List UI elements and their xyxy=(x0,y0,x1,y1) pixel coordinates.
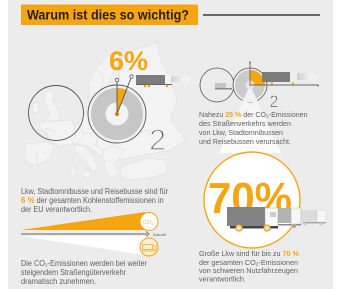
light beam xyxy=(219,85,281,153)
chart: 6 % pie in O of CO2 xyxy=(88,75,146,143)
icon: truck circle xyxy=(140,238,158,256)
text block: emissions outlook: Die CO₂-Emissionen werden bei weiter xyxy=(21,259,147,268)
text block: 6 percent: Lkw, Stadtomnibusse und Reisebusse sind für xyxy=(21,187,168,196)
axes xyxy=(250,63,318,85)
text block: 25 percent: 25 % der CO₂-Emissionen xyxy=(225,112,308,119)
text block: 70 percent: verantwortlich. xyxy=(199,274,246,284)
text block: emissions outlook: dramatisch zunehmen. xyxy=(21,277,96,286)
map borders xyxy=(36,62,150,164)
icon: small truck xyxy=(301,210,326,226)
text block: 25 percent: von Lkw, Stadtomnibussen xyxy=(199,130,283,137)
big 6% figure: 6% xyxy=(109,46,148,76)
circle: C of CO2 over map xyxy=(28,86,84,140)
heading: Warum ist dies so wichtig? xyxy=(27,8,189,22)
text block: emissions outlook: steigendem Straßengüterverkehr xyxy=(21,268,126,277)
icon: medium truck xyxy=(278,208,301,228)
subscript 2: 2 xyxy=(270,92,278,111)
text block: 6 percent: der gesamten Kohlenstoffemissionen in xyxy=(37,196,164,205)
text block: 70 percent: Große Lkw sind für bis zu xyxy=(199,249,282,258)
text block: 70 percent: 70 % xyxy=(282,249,299,258)
icon: trucks xyxy=(262,72,318,85)
icon: CO2 circle: CO₂ xyxy=(143,220,153,226)
text block: 25 percent: und Reisebussen verursacht. xyxy=(199,139,291,146)
icon: CO2 circle xyxy=(140,212,158,230)
ring chart xyxy=(233,68,267,102)
icon: small truck in C xyxy=(215,83,232,90)
text block: 25 percent: des Straßenverkehrs werden xyxy=(199,121,291,128)
text block: 70 percent: von schweren Nutzfahrzeugen xyxy=(199,266,298,275)
text block: 6 percent: der EU verantwortlich. xyxy=(21,205,92,214)
heading rule xyxy=(203,14,320,16)
chart: rising CO2 wedge xyxy=(21,212,145,230)
arrow: future: Zukunft xyxy=(153,233,167,237)
big 70% figure: 70% xyxy=(208,174,292,223)
callout: 70 percent xyxy=(204,152,326,248)
icon: large truck xyxy=(227,207,278,231)
circle: C xyxy=(200,68,234,102)
text block: 25 percent: Nahezu xyxy=(199,112,225,119)
arrow: future xyxy=(21,232,167,237)
text block: 70 percent: der gesamten CO₂-Emissionen xyxy=(199,258,298,267)
icon: trucks by 6% xyxy=(136,75,190,87)
text block: 6 percent: 6 % xyxy=(21,196,35,205)
map of Europe xyxy=(24,43,186,180)
chart: rising freight wedge xyxy=(21,236,145,255)
CO2 diagram: 25 percent xyxy=(200,62,319,111)
subscript 2 over map: 2 xyxy=(149,124,166,157)
